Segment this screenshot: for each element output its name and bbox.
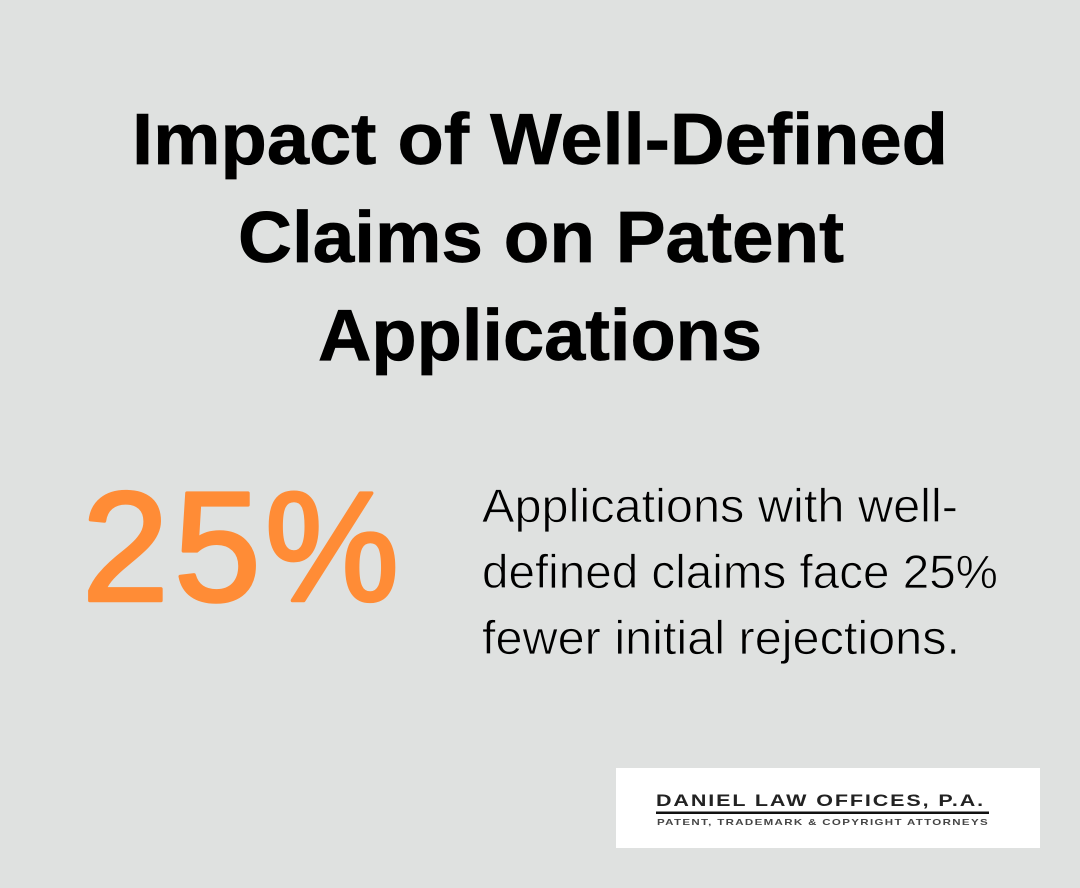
logo: Daniel Law Offices: PATENT, TRADEMARK & COPYRIGHT ATTORNEYS [657, 817, 989, 827]
big statistic: 25%: 5 [174, 460, 261, 634]
title: Applications [318, 296, 762, 376]
big statistic: 25%: 2 [82, 460, 169, 634]
statistic description: defined claims face 25% [482, 545, 998, 598]
title: Claims on Patent [238, 198, 844, 278]
title: Impact of Well-Defined [132, 100, 948, 180]
title [132, 100, 948, 376]
logo: Daniel Law Offices: DANIEL LAW OFFICES, P.A. [656, 791, 985, 810]
statistic description [482, 479, 998, 664]
logo: Daniel Law Offices [616, 768, 1040, 848]
big statistic: 25%: % [265, 460, 399, 634]
statistic description: fewer initial rejections. [482, 611, 960, 664]
statistic description: Applications with well- [482, 479, 958, 532]
big statistic: 25% [82, 460, 399, 634]
